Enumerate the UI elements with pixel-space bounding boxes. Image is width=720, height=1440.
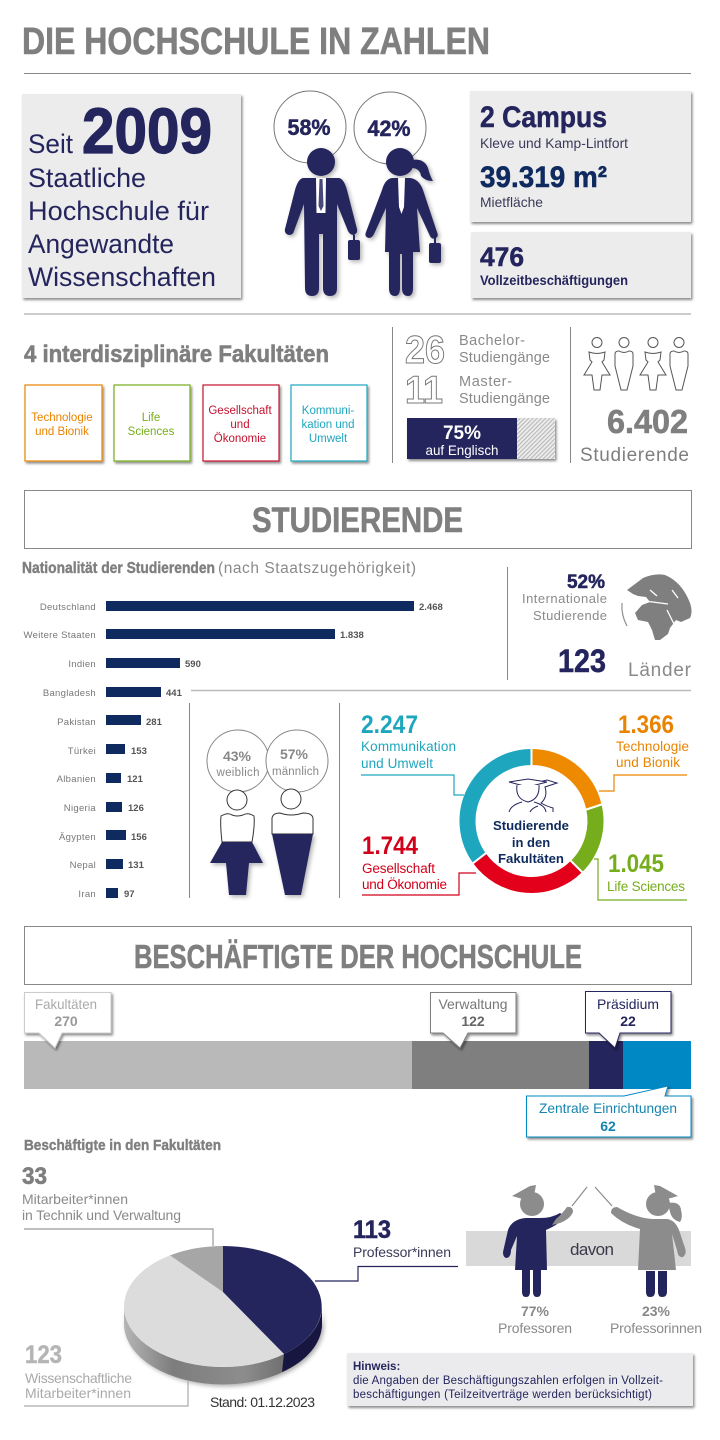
label: scientific staff: Wissenschaftliche — [25, 1370, 132, 1386]
icon: male students share — [266, 730, 328, 895]
bar chart: nationalities: 590 — [185, 659, 201, 670]
card: Kommunikation und Umwelt: Umwelt — [309, 433, 348, 445]
bubble: 58 percent — [274, 91, 346, 163]
panel: note: Hinweis: — [353, 1361, 400, 1373]
label: Life Sciences: 1.045 — [608, 850, 664, 878]
band: davon — [466, 1231, 691, 1266]
bar chart: nationalities: 2.468 — [419, 602, 443, 613]
label: Life Sciences — [594, 850, 687, 900]
donut centre text: Studierende — [493, 818, 569, 833]
stat: bachelor programmes: 26 — [405, 329, 445, 372]
donut centre text: Fakultäten — [498, 851, 564, 866]
label: technical staff: 33 — [22, 1163, 47, 1190]
stat: 123 countries: 123 — [558, 643, 606, 679]
panel: full-time positions — [471, 232, 691, 298]
stat: bachelor programmes — [405, 329, 550, 372]
label: scientific staff: Mitarbeiter*innen — [25, 1385, 131, 1401]
bar chart: nationalities: 126 — [128, 803, 144, 814]
panel: full-time positions: 476 — [480, 242, 524, 272]
heading: employees in faculties: Beschäftigte in den Fakultäten — [24, 1137, 221, 1154]
panel: founding year: Staatliche — [28, 163, 146, 193]
bar: 75 percent in English — [407, 418, 555, 459]
card: Gesellschaft und Ökonomie: und — [230, 419, 250, 431]
section header: Beschäftigte: BESCHÄFTIGTE DER HOCHSCHULE — [134, 938, 582, 975]
bar chart: nationalities: 281 — [146, 717, 163, 728]
card: Gesellschaft und Ökonomie: Ökonomie — [214, 433, 266, 445]
donut chart: students by faculty — [467, 748, 603, 885]
icon: man with briefcase — [285, 148, 360, 296]
bubble: 42 percent — [354, 92, 426, 164]
bar chart: nationalities: Indien — [68, 659, 96, 670]
label: Technologie und Bionik: und Bionik — [616, 755, 680, 770]
stat: female professors share: Professorinnen — [610, 1320, 702, 1336]
bar chart: nationalities: Bangladesh — [43, 688, 96, 699]
callout: Fakultäten — [24, 992, 111, 1048]
stat: international students: Studierende — [533, 608, 607, 623]
callout: Verwaltung: Verwaltung — [438, 996, 508, 1012]
card: Gesellschaft und Ökonomie: Gesellschaft — [208, 405, 272, 417]
label: technical staff: Mitarbeiter*innen — [22, 1191, 128, 1207]
icon: woman with briefcase — [365, 148, 441, 296]
stat: 123 countries: Länder — [628, 660, 692, 681]
callout: Zentrale Einrichtungen: 62 — [600, 1118, 616, 1134]
icon: male students share: 57% — [280, 746, 309, 762]
label: Gesellschaft und Ökonomie: Gesellschaft — [362, 861, 435, 876]
title: DIE HOCHSCHULE IN ZAHLEN — [22, 21, 490, 63]
label: technical staff — [22, 1163, 213, 1246]
panel: campus and area — [470, 91, 691, 222]
donut centre text: in den — [512, 835, 550, 850]
label: scientific staff — [24, 1341, 188, 1406]
stat: professors share — [498, 1303, 572, 1336]
icon: globe — [622, 574, 692, 640]
heading: nationality: Nationalität der Studierenden — [22, 560, 215, 577]
label: professors: 113 — [353, 1216, 391, 1244]
icon: female professor — [595, 1185, 686, 1297]
label: Kommunikation und Umwelt: und Umwelt — [361, 756, 433, 771]
label: professors — [315, 1216, 458, 1281]
callout: Präsidium — [586, 992, 671, 1048]
label: professors: Professor*innen — [353, 1244, 451, 1260]
heading: faculties: 4 interdisziplinäre Fakultäten — [24, 341, 329, 368]
panel: founding year: Angewandte — [28, 229, 174, 259]
bar chart: nationalities: Nigeria — [64, 803, 96, 814]
label: Technologie und Bionik — [599, 711, 689, 791]
label: Technologie und Bionik: Technologie — [616, 739, 689, 754]
stat: bachelor programmes: Bachelor- — [459, 333, 525, 349]
panel: note: beschäftigungen (Teilzeitverträge werden berücksichtigt) — [353, 1389, 652, 1401]
panel: founding year: Hochschule für — [28, 196, 209, 226]
bar: 75 percent in English: 75% — [443, 423, 481, 444]
panel: full-time positions: Vollzeitbeschäftigungen — [480, 272, 628, 288]
date note: Stand: 01.12.2023 — [210, 1394, 315, 1410]
stat: 6.402 students — [580, 403, 689, 466]
icon: female students share — [207, 730, 269, 895]
stat: female professors share: 23% — [642, 1303, 671, 1319]
label: Life Sciences: Life Sciences — [607, 879, 685, 894]
heading: nationality: (nach Staatszugehörigkeit) — [218, 560, 416, 577]
stat: 123 countries — [558, 643, 692, 681]
callout: Verwaltung: 122 — [461, 1013, 485, 1029]
label: Gesellschaft und Ökonomie: und Ökonomie — [362, 877, 447, 892]
section header: Beschäftigte — [24, 926, 692, 984]
card: Technologie und Bionik: und Bionik — [35, 426, 89, 438]
callout: Zentrale Einrichtungen: Zentrale Einrichtungen — [539, 1100, 677, 1116]
label: Kommunikation und Umwelt: Kommunikation — [361, 739, 456, 754]
stacked bar: employees — [24, 1041, 691, 1089]
panel: note — [347, 1353, 693, 1406]
bar chart: nationalities: Nepal — [70, 860, 96, 871]
bar chart: nationalities: 441 — [166, 688, 183, 699]
label: Kommunikation und Umwelt — [361, 711, 464, 795]
panel: campus and area: Kleve und Kamp-Lintfort — [480, 135, 628, 151]
bubble: 58 percent: 58% — [288, 115, 330, 140]
label: scientific staff: 123 — [25, 1341, 62, 1369]
panel: campus and area: 2 Campus — [480, 101, 607, 134]
stat: international students: Internationale — [522, 591, 607, 606]
card: Kommunikation und Umwelt — [291, 385, 367, 461]
card: Kommunikation und Umwelt: kation und — [301, 419, 355, 431]
bar chart: nationalities: Weitere Staaten — [24, 630, 96, 641]
icon: male professor — [503, 1185, 587, 1297]
panel: campus and area: 39.319 m² — [480, 161, 607, 194]
label: Kommunikation und Umwelt: 2.247 — [361, 711, 418, 739]
stat: master programmes — [405, 369, 550, 412]
icon: graduates — [509, 779, 557, 812]
bar chart: nationalities — [24, 601, 443, 900]
heading: nationality — [22, 560, 416, 577]
stat: master programmes: 11 — [405, 369, 443, 412]
stat: 6.402 students: Studierende — [580, 445, 689, 466]
callout: Präsidium: 22 — [620, 1013, 636, 1029]
bar chart: nationalities: 131 — [128, 860, 145, 871]
pie chart: faculty staff — [124, 1246, 322, 1384]
bar: 75 percent in English: auf Englisch — [426, 442, 498, 458]
panel: founding year: Seit — [28, 129, 73, 159]
bar chart: nationalities: Iran — [78, 889, 96, 900]
icon: female students share: 43% — [223, 748, 252, 764]
callout: Fakultäten: 270 — [54, 1013, 78, 1029]
callout: Präsidium: Präsidium — [597, 996, 659, 1012]
bar chart: nationalities: Türkei — [68, 746, 96, 757]
bar chart: nationalities: Deutschland — [40, 602, 96, 613]
bar chart: nationalities: 1.838 — [340, 630, 364, 641]
stat: international students: 52% — [567, 572, 605, 593]
bar chart: nationalities: Pakistan — [57, 717, 96, 728]
panel: note: die Angaben der Beschäftigungszahlen erfolgen in Vollzeit- — [353, 1375, 663, 1387]
panel: founding year: Wissenschaften — [28, 262, 216, 292]
panel: founding year — [22, 94, 241, 298]
stat: professors share: 77% — [521, 1303, 550, 1319]
stat: female professors share — [610, 1303, 702, 1336]
donut centre text — [493, 818, 569, 866]
stat: master programmes: Master- — [459, 374, 512, 390]
bar chart: nationalities: Albanien — [57, 774, 96, 785]
band: davon: davon — [570, 1240, 614, 1259]
section header: Studierende: STUDIERENDE — [252, 501, 463, 540]
label: Technologie und Bionik: 1.366 — [618, 711, 674, 739]
icon: female students share: weiblich — [216, 767, 260, 779]
stat: 6.402 students: 6.402 — [607, 403, 688, 440]
card: Life Sciences — [114, 385, 190, 461]
stat: professors share: Professoren — [498, 1320, 572, 1336]
icon: four student outlines — [584, 338, 688, 390]
bar chart: nationalities: 156 — [131, 832, 147, 843]
bar chart: nationalities: 153 — [131, 746, 147, 757]
card: Technologie und Bionik: Technologie — [31, 412, 93, 424]
card: Kommunikation und Umwelt: Kommuni- — [302, 405, 354, 417]
callout: Fakultäten: Fakultäten — [35, 996, 97, 1012]
stat: master programmes: Studiengänge — [459, 391, 550, 407]
icon: male students share: männlich — [272, 766, 319, 778]
panel: campus and area: Mietfläche — [480, 194, 543, 210]
label: Gesellschaft und Ökonomie: 1.744 — [362, 832, 418, 860]
callout: Zentrale Einrichtungen — [526, 1086, 691, 1137]
bar chart: nationalities: 97 — [124, 889, 135, 900]
bar chart: nationalities: 121 — [127, 774, 144, 785]
bar chart: nationalities: Ägypten — [59, 832, 96, 843]
bubble: 42 percent: 42% — [368, 116, 410, 141]
card: Gesellschaft und Ökonomie — [203, 385, 279, 461]
section header: Studierende — [24, 490, 692, 548]
label: technical staff: in Technik und Verwaltung — [22, 1207, 181, 1223]
card: Life Sciences: Life — [142, 412, 160, 424]
card: Technologie und Bionik — [25, 385, 102, 461]
year 2009: 2009 — [82, 95, 212, 167]
stat: international students — [522, 572, 607, 623]
label: Gesellschaft und Ökonomie — [362, 832, 476, 895]
card: Life Sciences: Sciences — [128, 426, 175, 438]
callout: Verwaltung — [430, 992, 516, 1048]
stat: bachelor programmes: Studiengänge — [459, 350, 550, 366]
